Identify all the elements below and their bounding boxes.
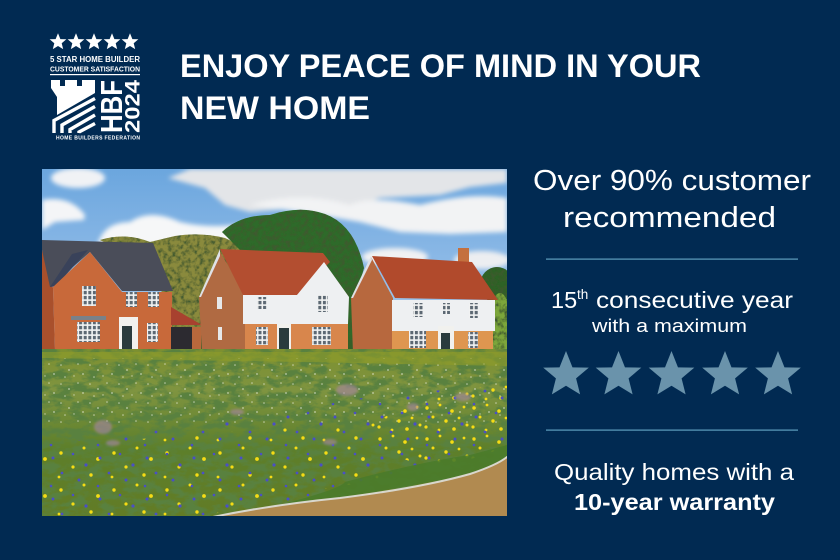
- stat: 15th consecutive year: 15: [551, 287, 577, 313]
- stat: 15th consecutive year: [551, 287, 793, 336]
- tree: large dark green: [222, 210, 364, 340]
- stat: 10-year warranty: [554, 459, 795, 515]
- icon: castle tower: [51, 80, 95, 133]
- text: Home Builders Federation: HOME BUILDERS FEDERATION: [56, 136, 140, 142]
- stat: 15th consecutive year: th: [577, 287, 588, 302]
- tree line: autumn trees: [100, 234, 240, 327]
- sky: [42, 169, 507, 359]
- text: 2024 vertical: 2024: [122, 80, 144, 133]
- gravel path: [213, 456, 507, 516]
- meadow: [42, 349, 507, 516]
- garage: [171, 307, 202, 352]
- HBF 5 star home builder badge: [50, 33, 145, 142]
- badge text line 1: 5 STAR HOME BUILDER: [50, 55, 140, 64]
- infographic canvas: [42, 33, 810, 516]
- title: NEW HOME: [180, 90, 370, 126]
- clouds: [42, 168, 510, 269]
- ground cover behind houses: [201, 300, 507, 349]
- badge text line 2: CUSTOMER SATISFACTION: [50, 64, 140, 74]
- title: ENJOY PEACE OF MIND IN YOUR: [180, 48, 701, 84]
- stat: customer recommended: recommended: [563, 202, 776, 234]
- five star rating: [543, 351, 801, 394]
- stat: 15th consecutive year: with a maximum: [591, 315, 747, 336]
- stat: 15th consecutive year: consecutive year: [596, 287, 793, 313]
- green verge beside path: [286, 445, 507, 504]
- house 2: terracotta roof, white weatherboard: [199, 249, 349, 353]
- icon: five stars: [50, 33, 138, 49]
- trees: right edge: [482, 267, 507, 349]
- house 1: dark slate roof and red brick: [42, 240, 173, 350]
- text: HBF vertical: HBF: [94, 80, 129, 133]
- mauve flower clumps: [94, 384, 471, 446]
- stat: customer recommended: Over 90% customer: [533, 165, 811, 197]
- title: [180, 48, 701, 126]
- house 3: terracotta roof, white weatherboard: [351, 248, 498, 353]
- stat: customer recommended: [533, 165, 811, 234]
- stat: 10-year warranty: 10-year warranty: [574, 489, 775, 515]
- stat: 10-year warranty: Quality homes with a: [554, 459, 795, 485]
- photo: new homes behind a wildflower meadow: [42, 168, 520, 530]
